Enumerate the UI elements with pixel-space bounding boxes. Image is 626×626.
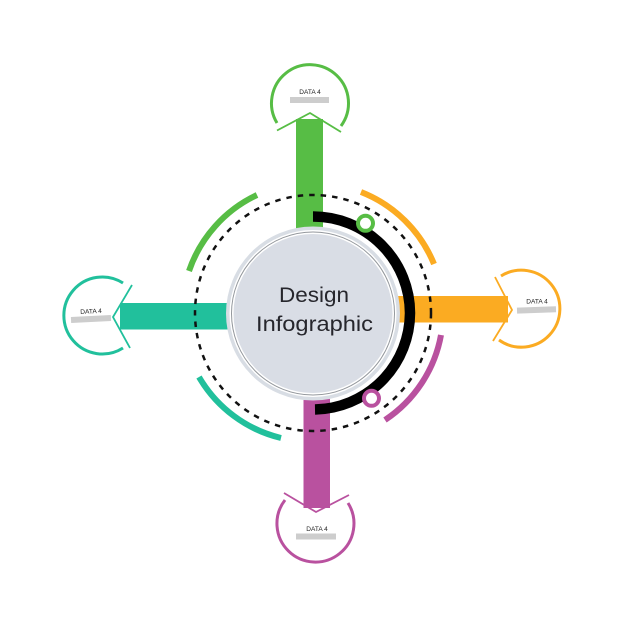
title: Infographic [256, 312, 373, 336]
purple arrow bar [304, 397, 330, 508]
black arc [313, 216, 410, 410]
green ring marker [358, 216, 373, 231]
node: green: DATA 4 [299, 89, 321, 96]
teal arrow bar [120, 303, 229, 330]
title: Design [279, 283, 349, 307]
node: purple [277, 493, 354, 562]
green arrow bar [296, 119, 323, 229]
dashed ring [195, 195, 431, 431]
node: green [271, 65, 348, 132]
arc: orange [361, 192, 434, 264]
node: orange [493, 270, 560, 347]
center circle [226, 226, 400, 400]
node: teal [64, 277, 132, 354]
arc: purple [385, 335, 441, 420]
orange arrow bar [397, 296, 508, 322]
arc: teal [199, 377, 281, 438]
arc: green [189, 195, 257, 271]
title [256, 283, 373, 336]
purple ring marker [364, 391, 379, 406]
node: purple: DATA 4 [306, 526, 328, 533]
node: orange: DATA 4 [526, 298, 548, 306]
node: teal: DATA 4 [80, 308, 102, 316]
